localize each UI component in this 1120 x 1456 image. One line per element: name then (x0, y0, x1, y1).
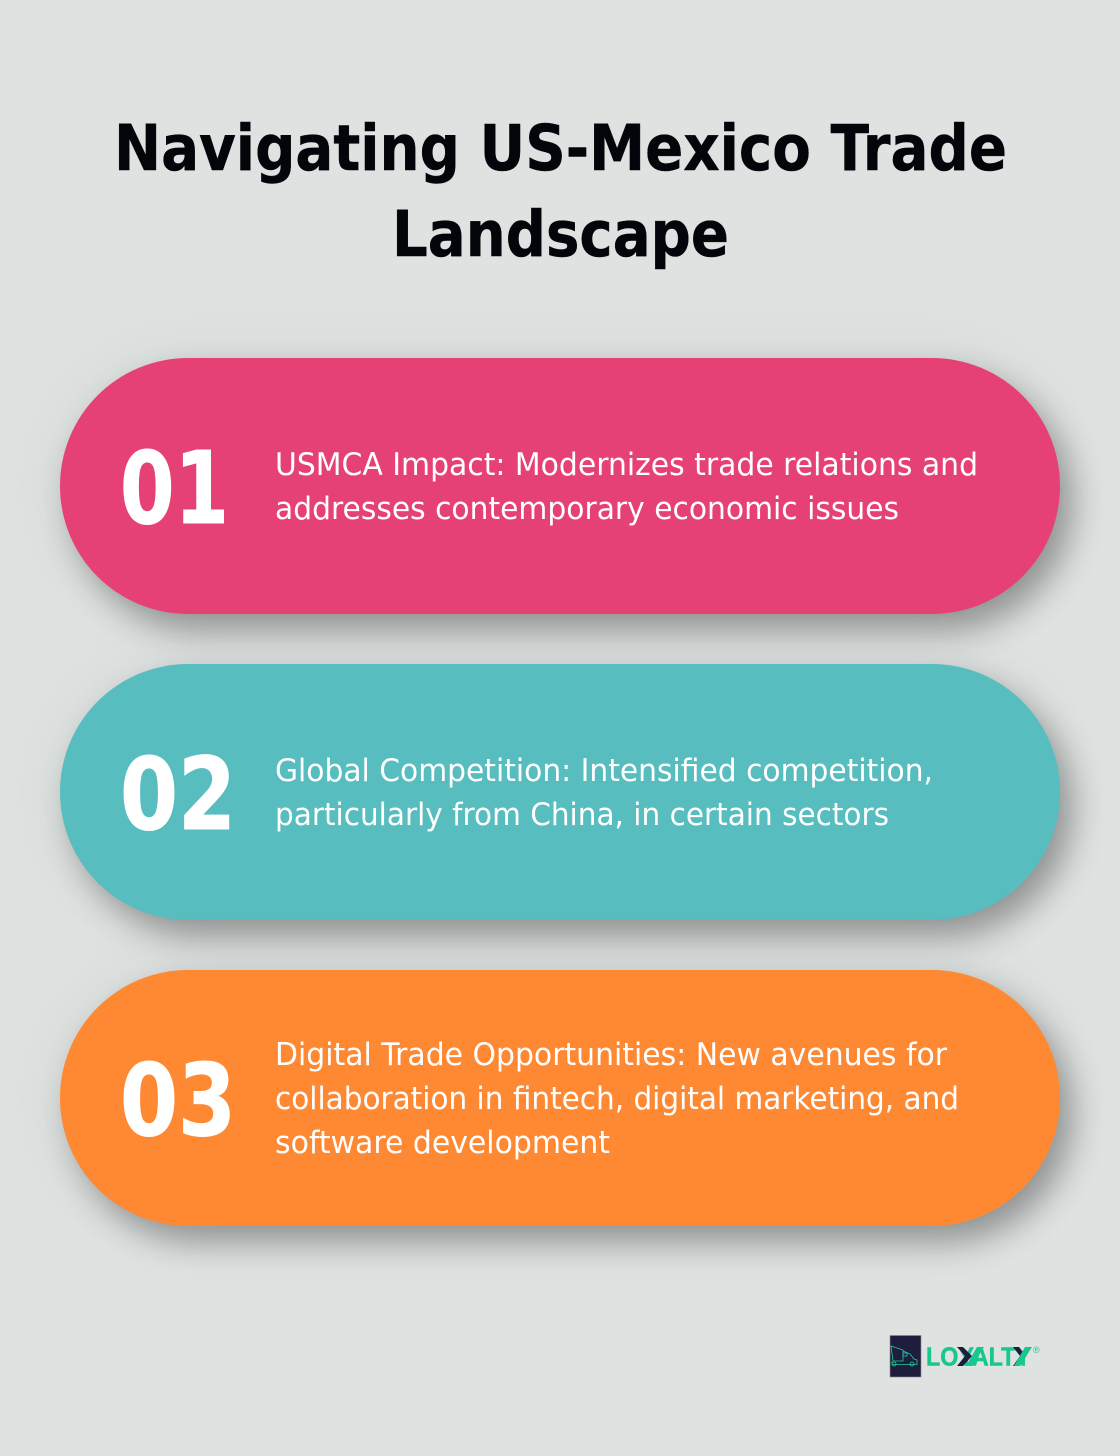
title: Landscape (392, 197, 729, 271)
description 01: addresses contemporary economic issues (275, 491, 899, 527)
description 03: collaboration in fintech, digital marketing, and (275, 1081, 959, 1117)
description 03: software development (275, 1125, 610, 1161)
title: Navigating US-Mexico Trade (114, 111, 1007, 185)
orange pill (60, 970, 1060, 1226)
wordmark: LOYALTY (926, 1342, 1031, 1372)
description 03 (275, 1037, 959, 1161)
number 03: 03 (120, 1042, 236, 1159)
number 02: 02 (120, 736, 236, 853)
description 02: particularly from China, in certain sectors (275, 797, 889, 833)
teal pill (60, 664, 1060, 920)
description 01: USMCA Impact: Modernizes trade relations and (275, 447, 978, 483)
logo: Loyalty (890, 1336, 1040, 1377)
icon: truck on dark square (890, 1336, 921, 1377)
wordmark: ® (1033, 1345, 1040, 1355)
description 02: Global Competition: Intensified competition, (275, 753, 933, 789)
description 03: Digital Trade Opportunities: New avenues for (275, 1037, 947, 1073)
panel: 01 USMCA impact (30, 328, 1090, 644)
panel: 03 digital trade (30, 940, 1090, 1256)
title (114, 111, 1007, 271)
description 02 (275, 753, 933, 833)
pink pill (60, 358, 1060, 614)
description 01 (275, 447, 978, 527)
number 01: 01 (120, 430, 229, 547)
panel: 02 global competition (30, 634, 1090, 950)
